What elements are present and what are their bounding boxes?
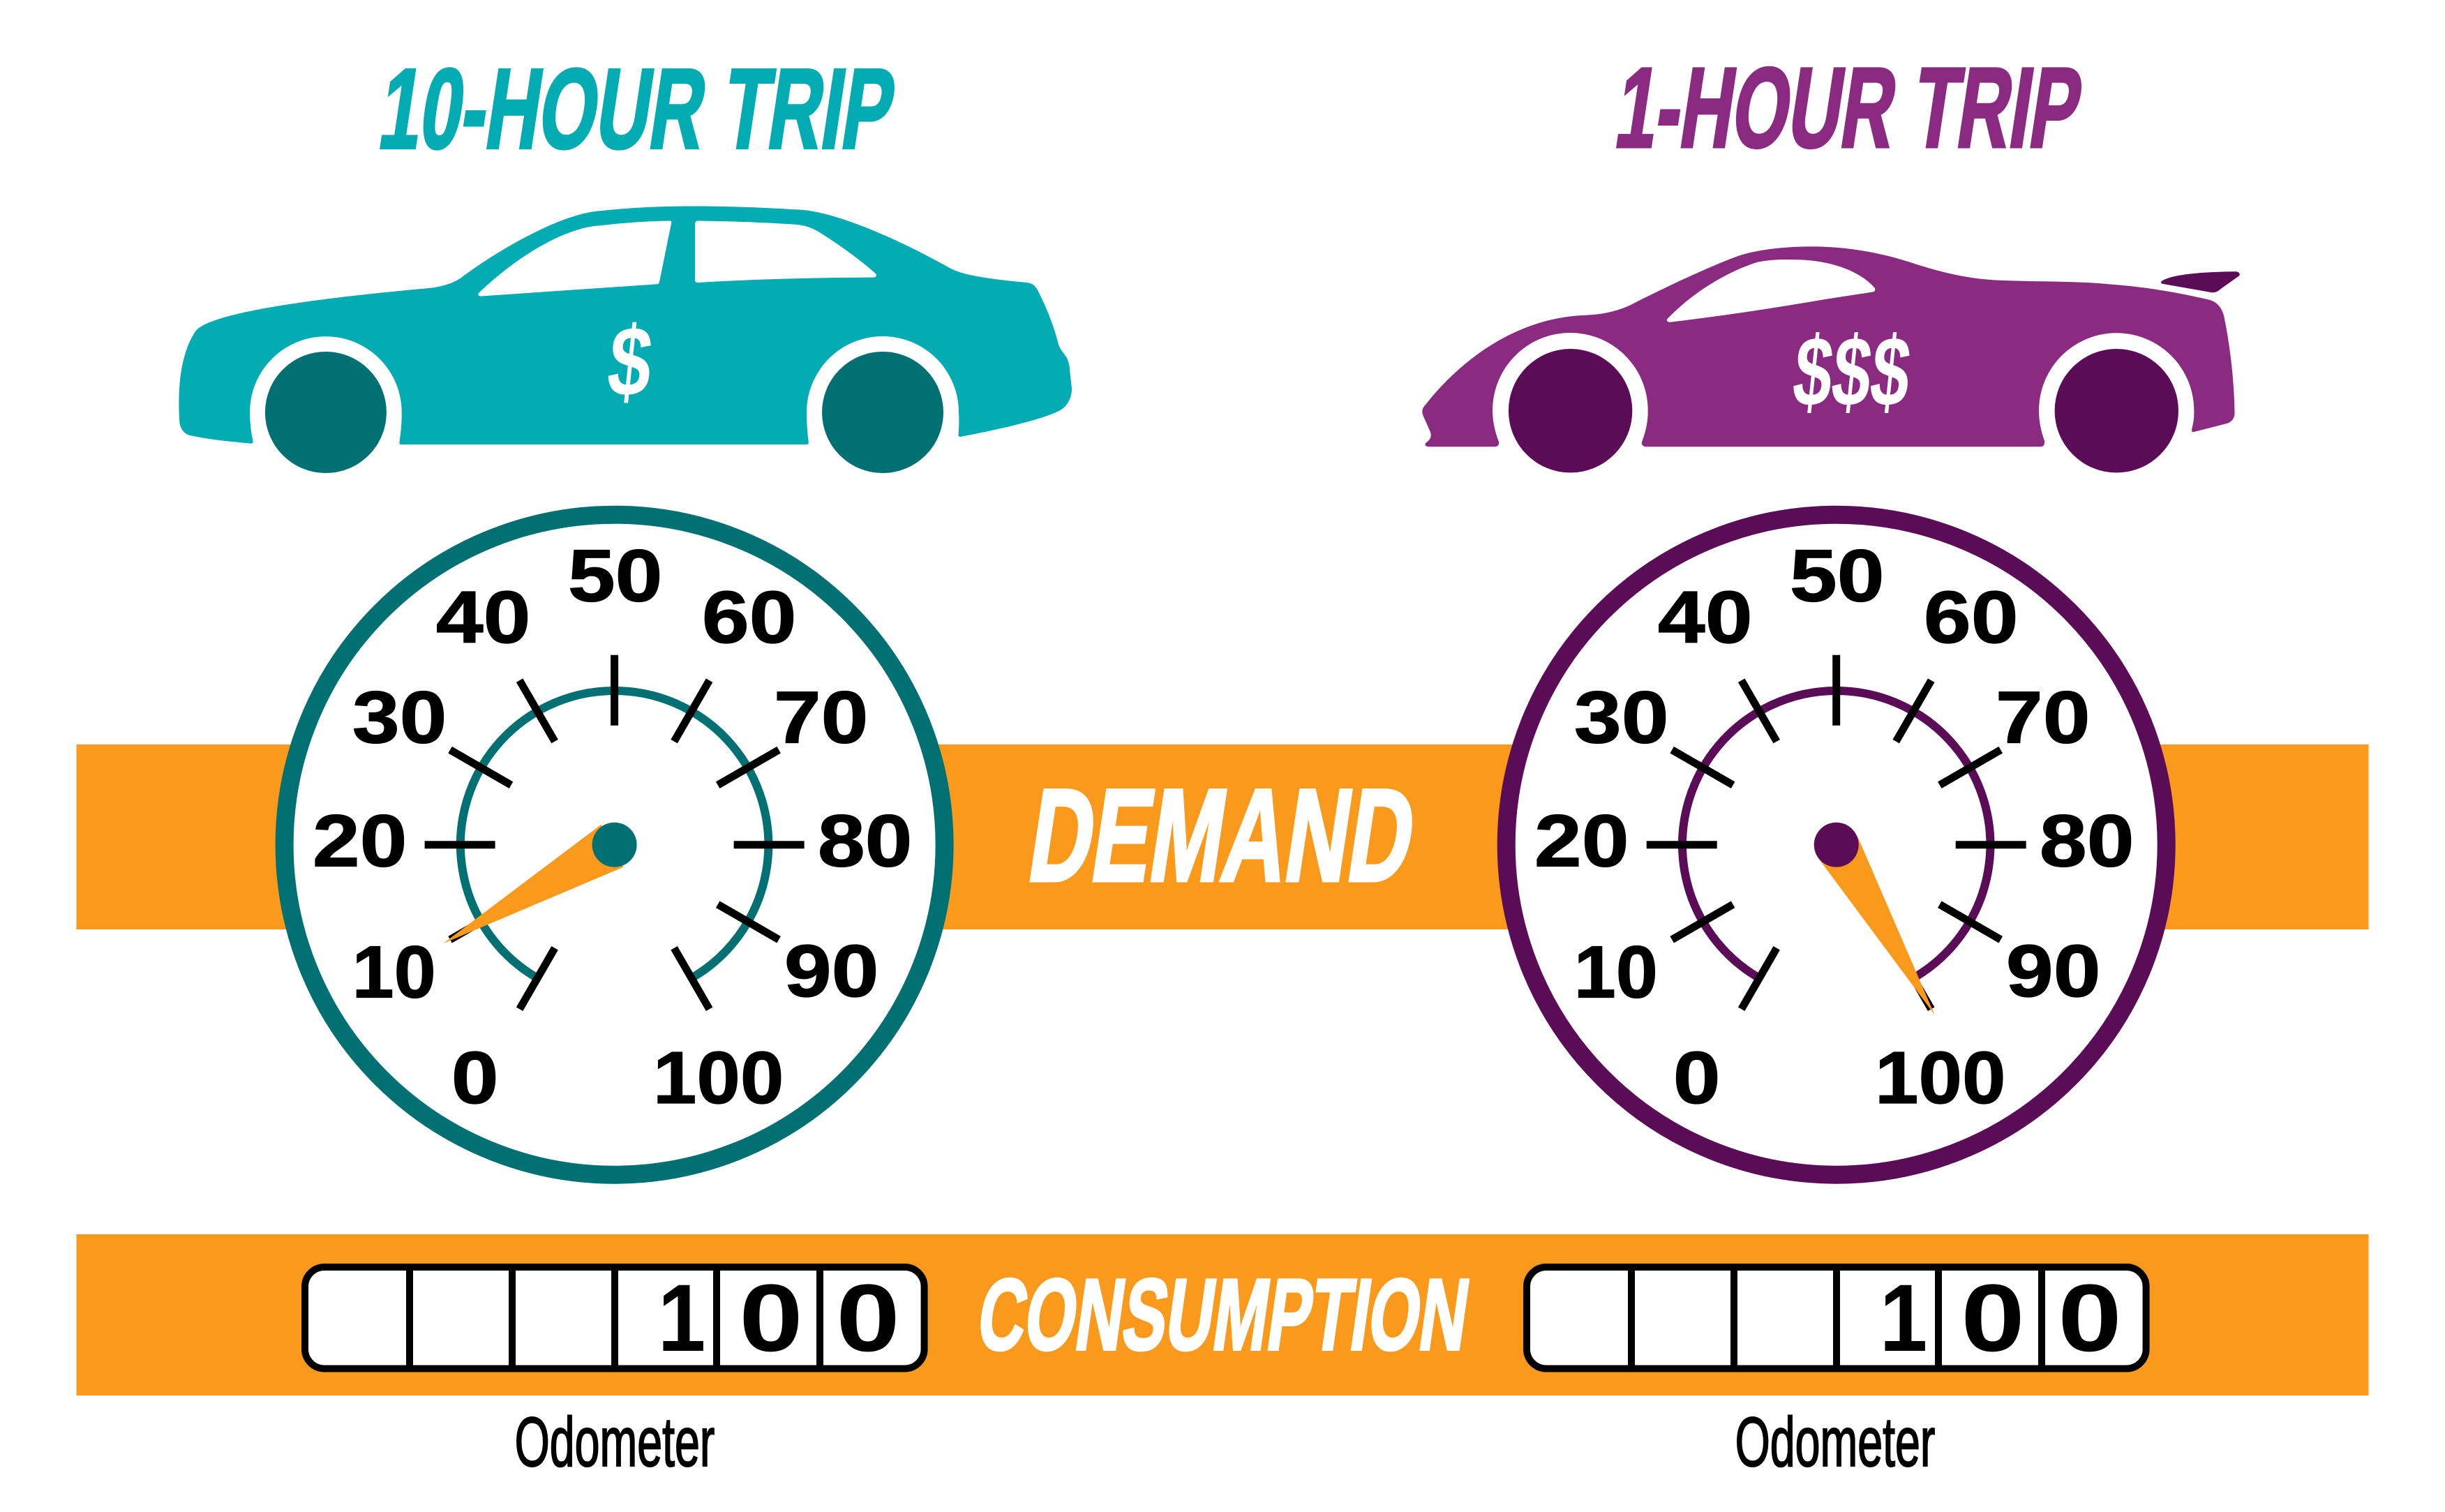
dollar sign: $: [603, 306, 657, 417]
odometer digits: 1: [658, 1264, 705, 1371]
scale numbers: 40: [1658, 577, 1752, 659]
odometer frame: [1527, 1267, 2146, 1369]
scale numbers: 80: [818, 800, 912, 882]
cell dividers: [410, 1267, 820, 1368]
scale arc: [1682, 691, 1990, 978]
scale numbers: 50: [568, 535, 662, 617]
odometer: 10-hour trip: [305, 1264, 925, 1372]
odometer digits: [1880, 1264, 2122, 1372]
scale numbers: 90: [784, 931, 878, 1012]
scale numbers: 70: [1996, 677, 2090, 759]
scale numbers: 90: [2006, 931, 2100, 1012]
scale numbers: 0: [451, 1038, 498, 1119]
hub: [592, 823, 637, 867]
car body: [1422, 246, 2234, 447]
odometer digits: 0: [836, 1265, 900, 1372]
scale numbers: 70: [774, 677, 868, 759]
odometer: 1-hour trip: [1527, 1264, 2146, 1372]
scale numbers: 20: [1534, 800, 1629, 882]
right wheel: [2055, 349, 2178, 472]
gauge dial: [285, 515, 945, 1175]
icon: sedan car: [179, 206, 1072, 473]
odometer digits: [658, 1264, 900, 1372]
rear window: [695, 220, 876, 283]
left wheel: [265, 352, 387, 473]
scale numbers: 100: [1875, 1037, 2005, 1119]
odometer digits: 1: [1880, 1264, 1927, 1371]
needle: [1818, 836, 1935, 1015]
caption: left odometer: Odometer: [515, 1403, 715, 1481]
left wheel: [1509, 349, 1632, 472]
band: demand: [77, 744, 2368, 929]
dollar signs: $$$: [1788, 317, 1915, 427]
scale numbers: [313, 535, 912, 1119]
scale numbers: 0: [1673, 1038, 1721, 1119]
scale numbers: 10: [1574, 930, 1658, 1013]
tick marks: [425, 655, 805, 1009]
odometer digits: 0: [2058, 1265, 2122, 1372]
scale numbers: 80: [2040, 800, 2134, 882]
caption: right odometer: Odometer: [1735, 1403, 1935, 1481]
hub: [1814, 823, 1859, 867]
front window: [478, 220, 671, 296]
scale arc: [461, 691, 768, 978]
side window: [1667, 260, 1875, 322]
scale numbers: 100: [653, 1037, 784, 1119]
label: demand: DEMAND: [1021, 763, 1424, 909]
gauge: 1-hour trip speedometer: [1506, 515, 2167, 1175]
scale numbers: [1534, 535, 2134, 1119]
odometer digits: 0: [1961, 1265, 2025, 1372]
heading: 10-hour trip: 10-HOUR TRIP: [373, 45, 903, 172]
heading: 1-hour trip: 1-HOUR TRIP: [1609, 44, 2090, 171]
scale numbers: 50: [1790, 535, 1884, 617]
tick marks: [1647, 655, 2026, 1009]
scale numbers: 30: [352, 677, 447, 759]
needle: [443, 825, 623, 943]
scale numbers: 30: [1574, 677, 1668, 759]
gauge: 10-hour trip speedometer: [285, 515, 945, 1175]
cell dividers: [1631, 1267, 2042, 1368]
icon: sports car: [1422, 246, 2240, 472]
scale numbers: 60: [1924, 577, 2018, 659]
scale numbers: 60: [702, 577, 796, 659]
label: consumption: CONSUMPTION: [972, 1258, 1476, 1371]
spoiler: [2161, 271, 2240, 292]
scale numbers: 40: [436, 577, 530, 659]
odometer digits: 0: [739, 1265, 803, 1372]
scale numbers: 10: [352, 930, 436, 1013]
right wheel: [822, 352, 943, 473]
gauge dial: [1506, 515, 2167, 1175]
odometer frame: [305, 1267, 925, 1369]
car body: [179, 206, 1072, 444]
band: consumption: [77, 1234, 2368, 1395]
scale numbers: 20: [313, 800, 407, 882]
